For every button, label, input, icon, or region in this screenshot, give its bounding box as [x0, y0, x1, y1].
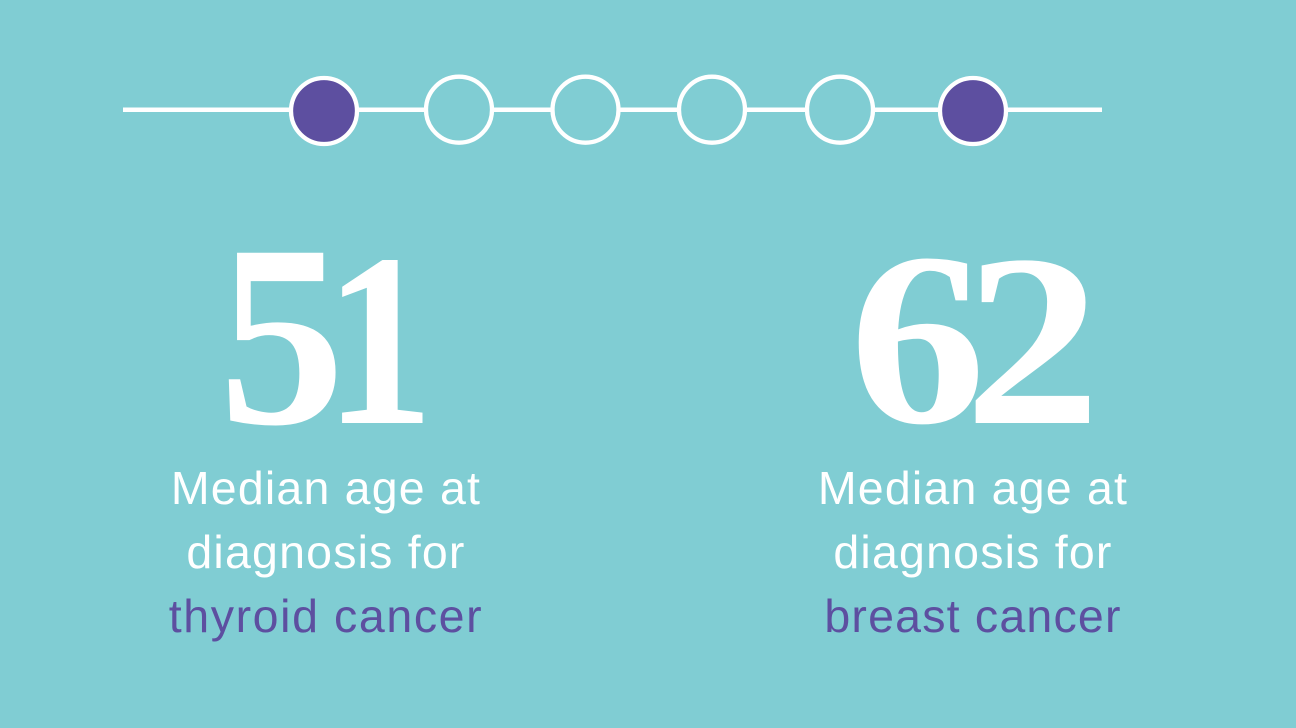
marker: empty 2: [552, 77, 618, 143]
caption: thyroid cancer: [169, 462, 483, 642]
number: 62: [849, 230, 1101, 440]
caption: breast cancer: breast cancer: [824, 590, 1122, 642]
number: 51: [219, 230, 434, 440]
marker: empty 3: [679, 77, 745, 143]
marker: age 62: [940, 78, 1006, 144]
marker: age 51: [291, 78, 357, 144]
timeline: [123, 74, 1102, 146]
marker: empty 1: [426, 77, 492, 143]
caption: thyroid cancer: thyroid cancer: [169, 590, 483, 642]
caption: breast cancer: [818, 462, 1128, 642]
caption: thyroid cancer: Median age at: [171, 462, 481, 514]
caption: breast cancer: diagnosis for: [833, 526, 1113, 578]
caption: thyroid cancer: diagnosis for: [186, 526, 466, 578]
caption: breast cancer: Median age at: [818, 462, 1128, 514]
marker: empty 4: [807, 77, 873, 143]
